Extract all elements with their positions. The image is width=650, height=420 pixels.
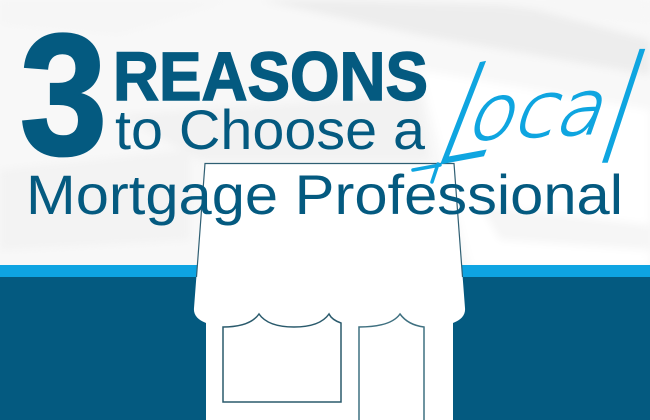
textured light background: [0, 0, 650, 266]
storefront window: [223, 314, 341, 402]
light blue band: [0, 265, 650, 277]
numeral 3: 3: [20, 0, 107, 191]
heading: Mortgage Professional: Mortgage Professional: [26, 163, 623, 226]
heading: to Choose a: to Choose a: [115, 98, 426, 161]
navy lower panel: [0, 277, 650, 420]
heading: REASONS: REASONS: [113, 38, 428, 115]
script word: Local: [413, 26, 650, 199]
swash of the script L: [413, 164, 440, 182]
storefront silhouette: [194, 164, 465, 420]
title: [20, 0, 623, 226]
script word: Local: oca: [458, 61, 624, 158]
storefront outline: [196, 164, 462, 277]
storefront door: [359, 314, 424, 420]
icon: storefront: [194, 164, 465, 420]
script word: Local: L: [415, 27, 537, 199]
